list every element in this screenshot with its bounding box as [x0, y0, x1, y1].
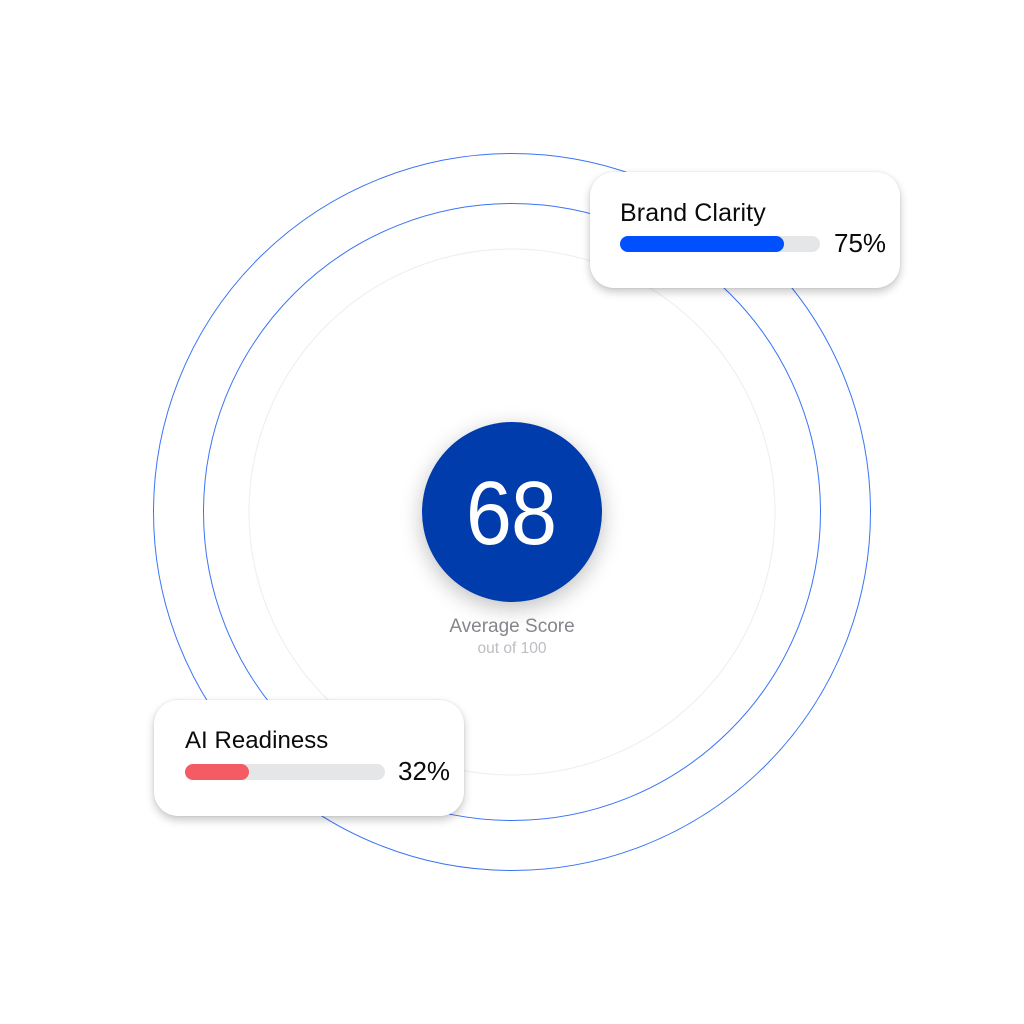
- ai readiness progress bar: [185, 764, 385, 780]
- out of 100 caption: out of 100: [478, 640, 546, 657]
- center score circle: [422, 422, 602, 602]
- brand clarity percentage: 75%: [834, 228, 886, 258]
- card: ai readiness: [154, 700, 464, 816]
- ai readiness percentage: 32%: [398, 756, 450, 786]
- brand clarity label: Brand Clarity: [620, 199, 766, 227]
- ai readiness label: AI Readiness: [185, 727, 328, 754]
- average score caption: Average Score: [449, 616, 575, 637]
- score number: 68: [466, 464, 556, 564]
- card: brand clarity: [590, 172, 900, 288]
- brand clarity progress bar: [620, 236, 820, 252]
